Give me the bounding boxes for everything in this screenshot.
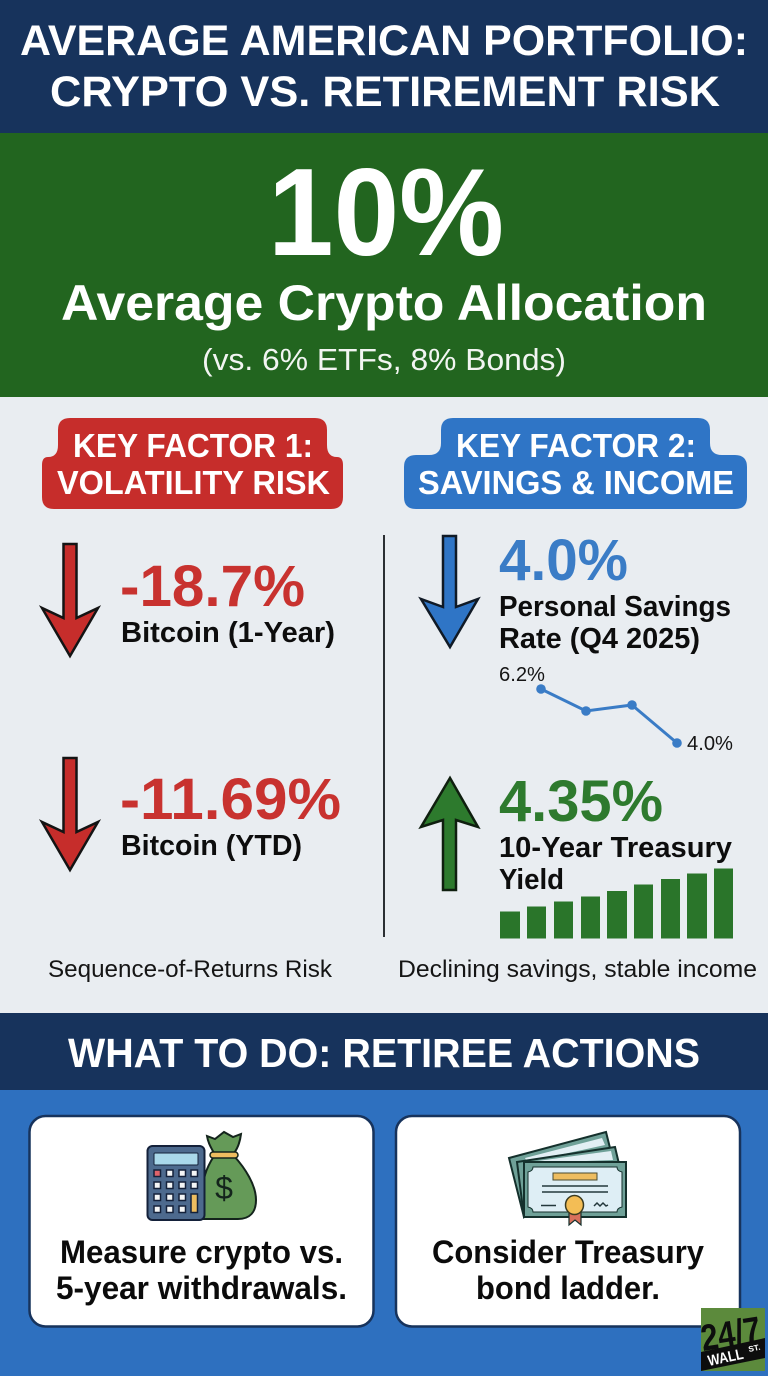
stat: personal savings rate: 4.0%	[499, 528, 628, 593]
caption: savings and income: Declining savings, stable income	[398, 956, 757, 983]
stat: treasury yield: Yield	[499, 864, 564, 896]
stat: bitcoin YTD: -11.69%	[120, 767, 341, 832]
arrow: bitcoin YTD down	[42, 758, 98, 870]
stat: treasury yield	[499, 769, 732, 896]
bar chart: treasury yield	[500, 868, 733, 938]
action text: 5-year withdrawals.	[56, 1270, 347, 1306]
caption: sequence risk: Sequence-of-Returns Risk	[48, 956, 333, 983]
icon: calculator and money bag	[148, 1132, 256, 1220]
badge: key factor 1: VOLATILITY RISK	[57, 465, 330, 502]
arrow: savings down	[421, 536, 478, 647]
stat: treasury yield: 4.35%	[499, 769, 663, 834]
action text: Measure crypto vs.	[60, 1234, 343, 1270]
panel: retiree actions	[0, 1090, 768, 1376]
panel: title banner	[0, 0, 768, 133]
arrow: treasury yield up	[421, 778, 478, 890]
panel: key factors	[0, 397, 768, 1013]
action text: bond ladder.	[476, 1270, 660, 1306]
line chart: savings rate	[499, 664, 733, 755]
logo: 24/7 Wall St.: ST.	[748, 1343, 761, 1354]
line chart: savings rate: 6.2%	[499, 664, 545, 686]
heading: WHAT TO DO: RETIREE ACTIONS	[68, 1030, 700, 1076]
big number: 10%	[268, 144, 504, 282]
stat: treasury yield: 10-Year Treasury	[499, 832, 732, 864]
stat: personal savings rate: Personal Savings	[499, 591, 731, 623]
title	[20, 17, 748, 116]
logo: 24/7 Wall St.: WALL	[706, 1346, 745, 1370]
badge: key factor 1	[42, 418, 343, 509]
badge: key factor 2: SAVINGS & INCOME	[418, 465, 734, 502]
line chart: savings rate: 4.0%	[687, 733, 733, 755]
arrow: bitcoin 1-year down	[42, 544, 98, 656]
stat: personal savings rate	[499, 528, 731, 655]
stat: bitcoin YTD	[120, 767, 341, 862]
card: treasury ladder	[396, 1116, 740, 1326]
action text: Consider Treasury	[432, 1234, 704, 1270]
stat: bitcoin YTD: Bitcoin (YTD)	[121, 830, 302, 862]
statistic label: Average Crypto Allocation	[61, 275, 707, 331]
card: measure crypto	[30, 1116, 374, 1326]
icon: calculator and money bag: $	[215, 1170, 233, 1206]
stat: bitcoin 1-year	[120, 554, 335, 649]
badge: key factor 2: KEY FACTOR 2:	[456, 428, 696, 465]
action text	[432, 1234, 704, 1306]
action text	[56, 1234, 347, 1306]
icon: bond certificates	[509, 1132, 626, 1225]
badge: key factor 2	[404, 418, 747, 509]
badge: key factor 1: KEY FACTOR 1:	[73, 428, 313, 465]
panel: headline statistic	[0, 133, 768, 397]
panel: actions heading	[0, 1013, 768, 1090]
comparison note: (vs. 6% ETFs, 8% Bonds)	[202, 342, 566, 377]
stat: bitcoin 1-year: -18.7%	[120, 554, 305, 619]
title: AVERAGE AMERICAN PORTFOLIO:	[20, 17, 748, 65]
stat: personal savings rate: Rate (Q4 2025)	[499, 623, 700, 655]
stat: bitcoin 1-year: Bitcoin (1-Year)	[121, 617, 335, 649]
title: CRYPTO VS. RETIREMENT RISK	[50, 68, 720, 116]
